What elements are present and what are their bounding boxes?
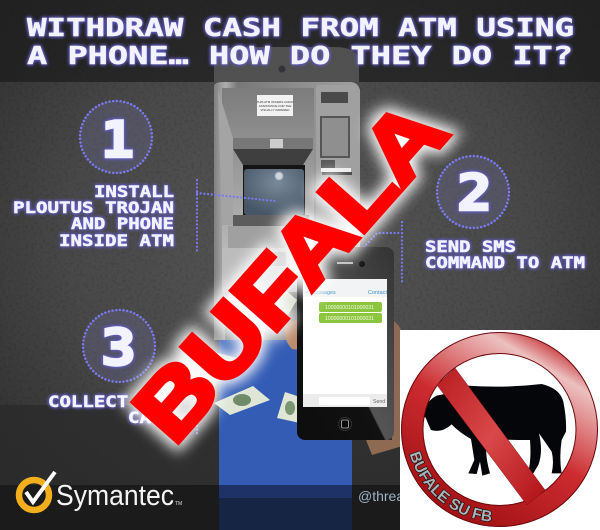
badge caption: BUFALE SU FB <box>409 450 492 522</box>
ATM illustration <box>214 47 360 340</box>
footer band <box>0 485 600 530</box>
ATM shelf <box>222 215 352 340</box>
step 2: text <box>425 237 585 272</box>
Symantec logo: Symantec <box>56 480 174 512</box>
step 2: circle <box>437 156 509 228</box>
hand holding phone <box>285 318 406 455</box>
SMS bubbles <box>319 302 382 323</box>
ATM dome <box>214 47 359 82</box>
"no buffalo" badge panel <box>400 330 600 530</box>
message input: Send <box>373 399 385 405</box>
step 1: text: INSTALL <box>94 182 174 201</box>
step 1: text: AND PHONE <box>71 214 174 233</box>
step 2: circle: 2 <box>457 164 492 222</box>
Symantec logo <box>19 472 182 512</box>
step 1: text <box>13 182 174 250</box>
ATM hood <box>233 138 313 165</box>
ATM recess <box>222 88 314 250</box>
ATM notice sign <box>257 95 294 116</box>
ATM notice sign: THIS ATM OFFERS AUDIO <box>257 100 294 104</box>
step 2: text: SEND SMS <box>425 237 516 256</box>
step 2: pointer <box>348 222 402 282</box>
step 1: text: INSIDE ATM <box>59 231 174 250</box>
buffalo silhouette <box>412 384 566 476</box>
step 1: circle <box>80 101 152 173</box>
step 3: text: COLLECT THE <box>48 392 174 411</box>
step 3: pointer <box>196 385 198 434</box>
phone home button <box>338 418 352 430</box>
ATM notice sign: ASSISTANCE FOR THE <box>259 104 291 108</box>
step 3: text: CASH <box>128 408 174 427</box>
BUFALA stamp: BUFALA <box>114 81 465 460</box>
banknotes <box>214 288 300 423</box>
step 3: circle <box>83 310 155 382</box>
ATM body <box>214 82 360 340</box>
@threatintel handle: @threatintel <box>358 488 434 504</box>
prohibition bar <box>437 368 545 505</box>
ATM monitor <box>243 165 305 215</box>
title <box>27 13 574 70</box>
prohibition ring <box>412 343 587 516</box>
step 2: text: COMMAND TO ATM <box>425 253 585 272</box>
title: WITHDRAW CASH FROM ATM USING <box>27 13 574 42</box>
ATM notice sign: VISUALLY IMPAIRED <box>260 108 290 112</box>
step 3: circle: 3 <box>101 319 136 377</box>
step 3: text <box>48 392 174 427</box>
SMS bubbles: 10000000101000031 <box>325 316 374 322</box>
smartphone <box>297 247 394 440</box>
blue cash panel <box>219 340 352 530</box>
phone screen: < Messages <box>306 290 336 296</box>
phone screen <box>303 279 387 407</box>
Symantec checkmark icon <box>19 472 55 510</box>
lower dark band <box>0 405 600 485</box>
SMS bubbles: 10000000101000031 <box>325 305 374 311</box>
Symantec logo: TM <box>175 501 182 507</box>
title band <box>0 0 600 82</box>
phone screen: Contact <box>368 290 387 296</box>
title: A PHONE… HOW DO THEY DO IT? <box>27 41 573 70</box>
step 1: pointer <box>197 180 275 252</box>
ATM right panel <box>316 85 357 250</box>
step 1: circle: 1 <box>101 111 134 169</box>
BUFALA stamp: BUFALA <box>114 81 465 460</box>
step 1: text: PLOUTUS TROJAN <box>13 198 174 217</box>
